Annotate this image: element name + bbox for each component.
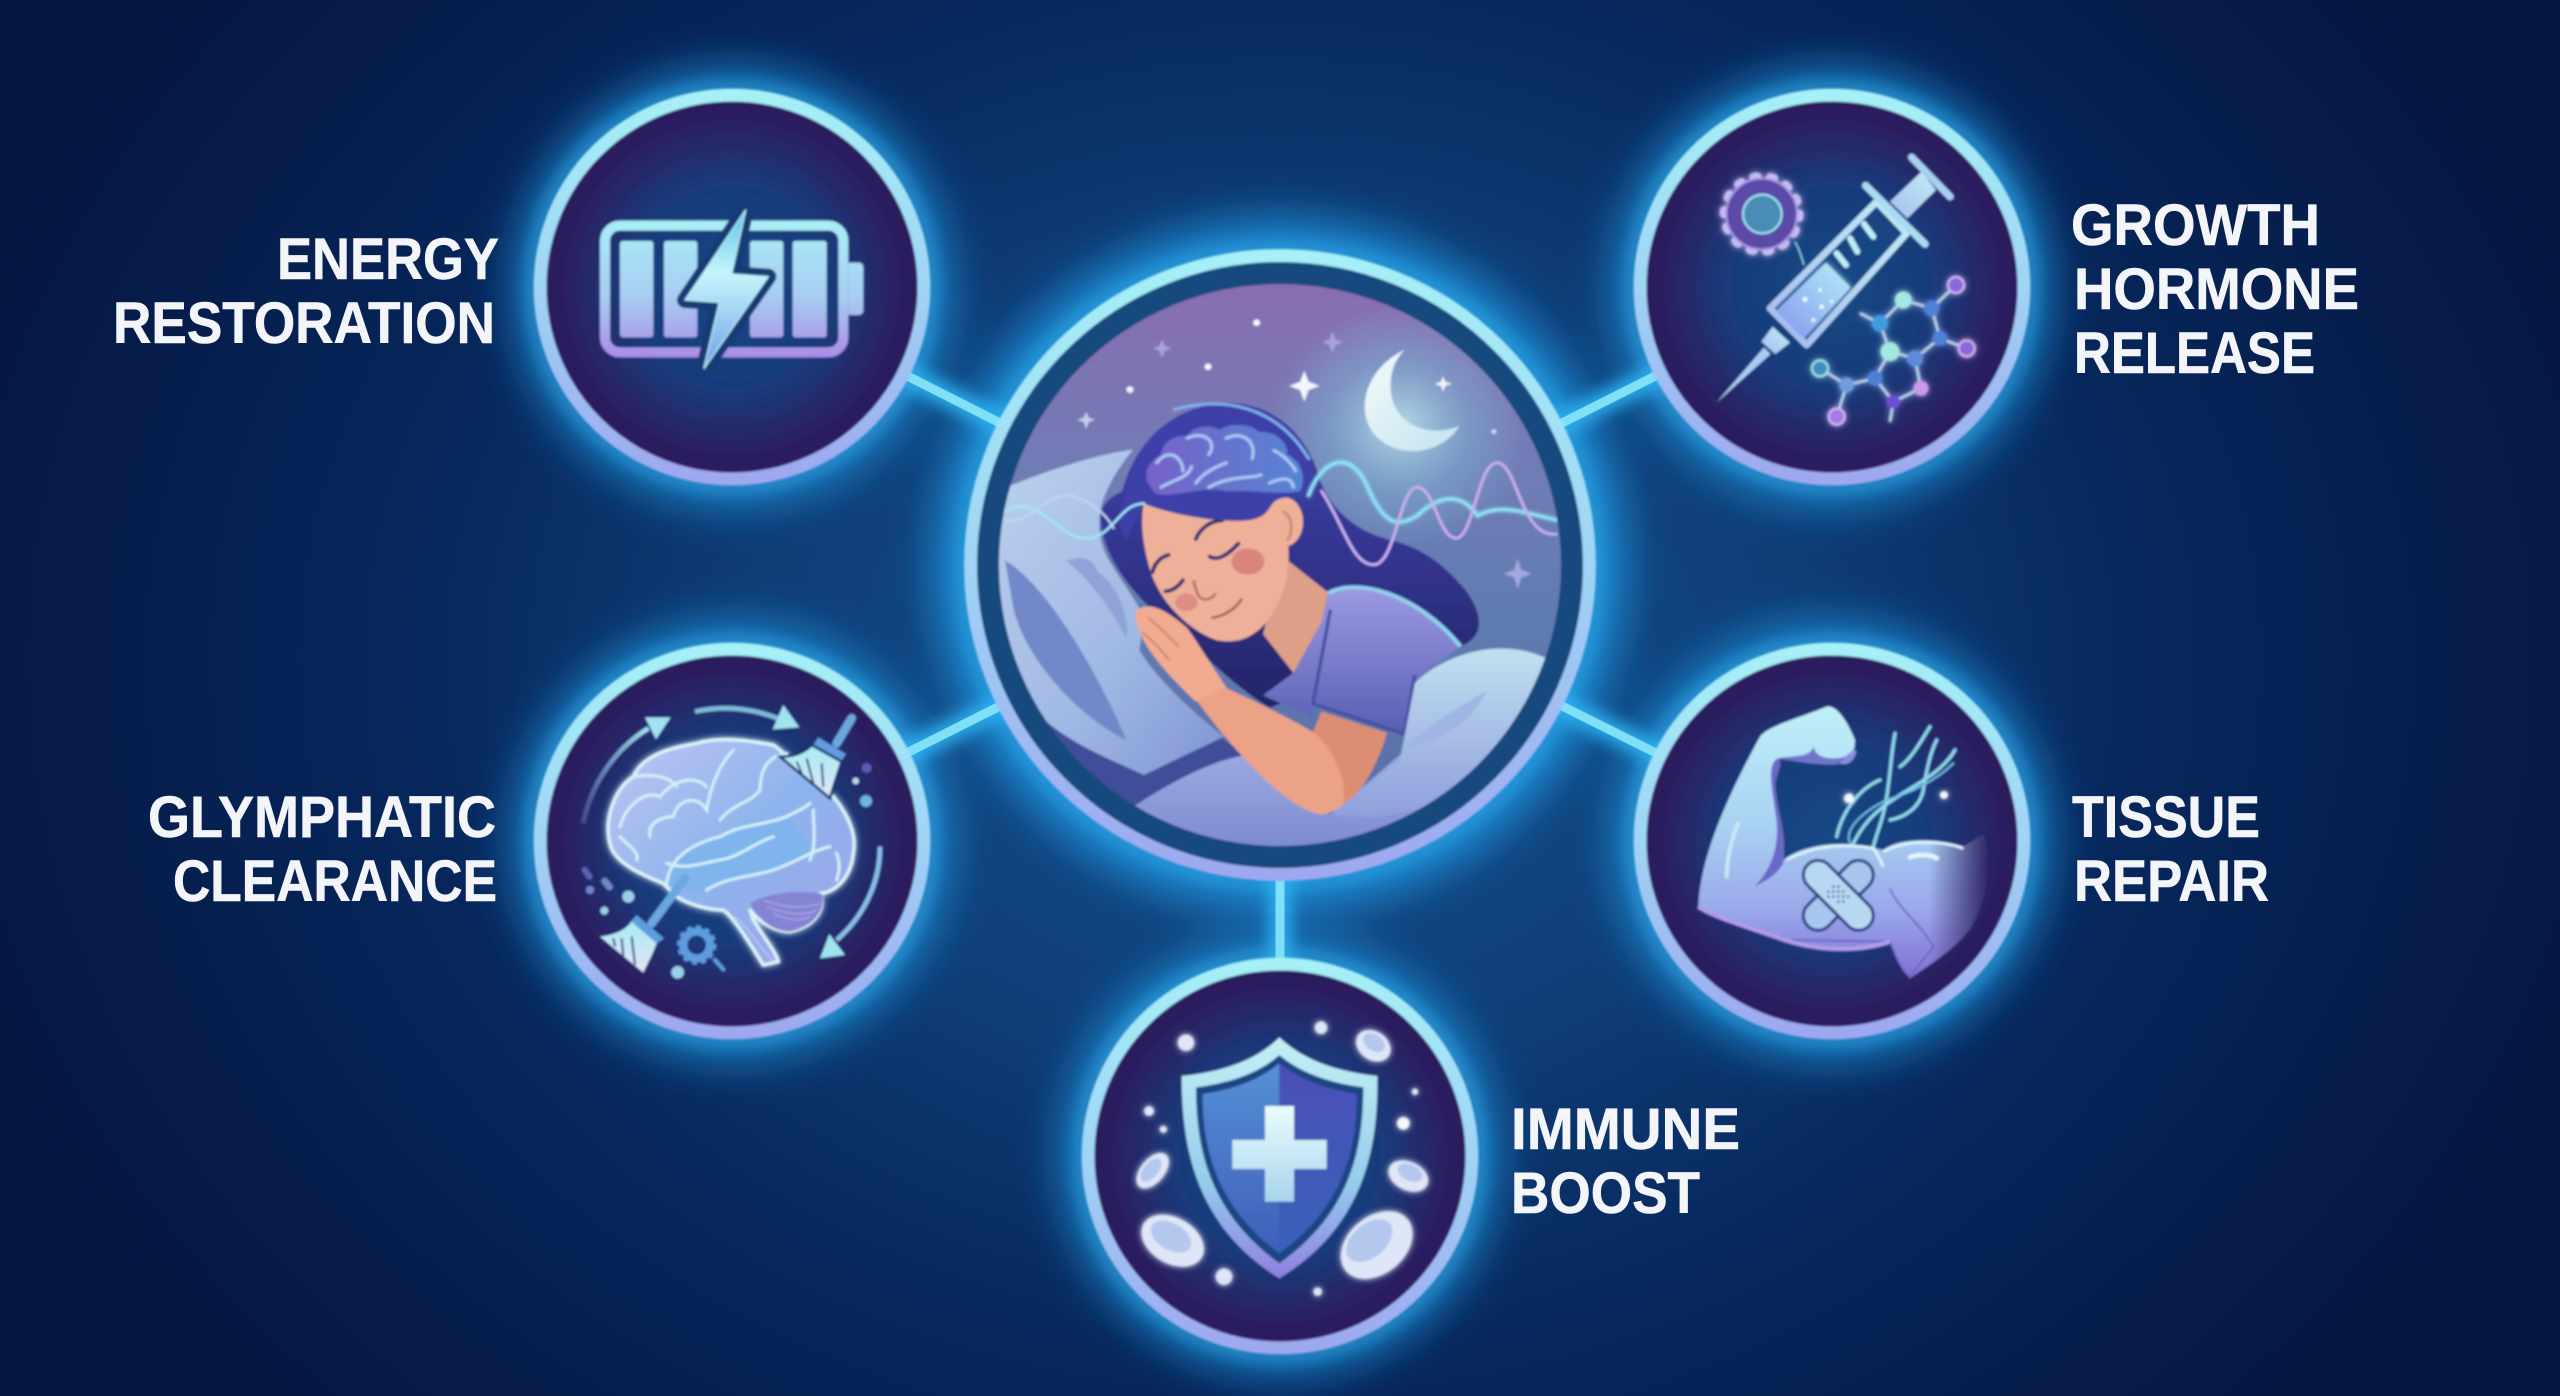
icon: shield with cross and cells [1130, 1022, 1433, 1296]
arm [1196, 687, 1387, 815]
label: energy restoration [113, 227, 499, 356]
panel: immune boost circle [1088, 964, 1472, 1348]
icon: flexed arm with bandage [1698, 707, 1987, 978]
brain waves [1005, 404, 1556, 565]
neck [1263, 557, 1328, 673]
label: growth hormone release: HORMONE [2074, 257, 2359, 322]
connectors between hub and benefit circles [732, 287, 1832, 1156]
icon: battery with lightning bolt [605, 210, 863, 368]
hand [1135, 606, 1226, 701]
cell [1724, 177, 1799, 251]
panel: glymphatic clearance circle [540, 649, 924, 1033]
moon [1365, 350, 1460, 451]
debris [581, 763, 872, 979]
panel: central sleeping person [970, 256, 1590, 883]
hair fringe over forehead [1120, 403, 1313, 540]
needle [1717, 347, 1771, 402]
label: immune boost: BOOST [1511, 1161, 1700, 1226]
label: growth hormone release: GROWTH [2071, 193, 2320, 258]
label: tissue repair [2072, 785, 2269, 914]
hair back [1100, 403, 1479, 708]
broom top right [780, 718, 852, 798]
pillow [983, 450, 1224, 775]
face [1142, 503, 1289, 641]
barrel [1770, 202, 1907, 345]
shirt [1263, 588, 1460, 734]
label: glymphatic clearance: CLEARANCE [173, 849, 497, 914]
facial features [1153, 521, 1238, 591]
right blanket [1330, 648, 1556, 818]
icon: brain with brooms and arrows [581, 705, 880, 979]
arm [1698, 707, 1987, 978]
temporal lobe band [667, 817, 813, 893]
label: energy restoration: ENERGY [277, 227, 499, 292]
label: immune boost [1511, 1097, 1740, 1226]
broom bottom left [600, 878, 685, 973]
label: energy restoration: RESTORATION [113, 291, 495, 356]
bandage [1797, 854, 1879, 936]
stars [1077, 319, 1532, 589]
glow halos behind circles [530, 85, 2034, 1358]
panel: growth hormone release circle [1640, 95, 2024, 479]
brain on head [1146, 425, 1303, 495]
icon: syringe, cell and molecule [1717, 157, 1975, 425]
muscle fibres [1837, 727, 1955, 847]
cells [1130, 1022, 1433, 1296]
label: growth hormone release [2071, 193, 2359, 386]
brain [608, 740, 854, 965]
label: glymphatic clearance: GLYMPHATIC [148, 785, 496, 850]
label: tissue repair: REPAIR [2074, 849, 2269, 914]
label: immune boost: IMMUNE [1511, 1097, 1740, 1162]
panel: energy restoration circle [540, 95, 924, 479]
panel: tissue repair circle [1640, 649, 2024, 1033]
label: growth hormone release: RELEASE [2074, 321, 2315, 386]
arm contour shading [1755, 758, 1784, 886]
cheeks [1231, 548, 1264, 575]
molecule [1812, 277, 1975, 425]
label: glymphatic clearance [148, 785, 497, 914]
label: tissue repair: TISSUE [2072, 785, 2260, 850]
circular arrows [583, 708, 880, 940]
bed dark [1048, 724, 1241, 806]
ear [1267, 497, 1303, 546]
blanket [1134, 754, 1418, 848]
moon glow [1286, 316, 1514, 532]
